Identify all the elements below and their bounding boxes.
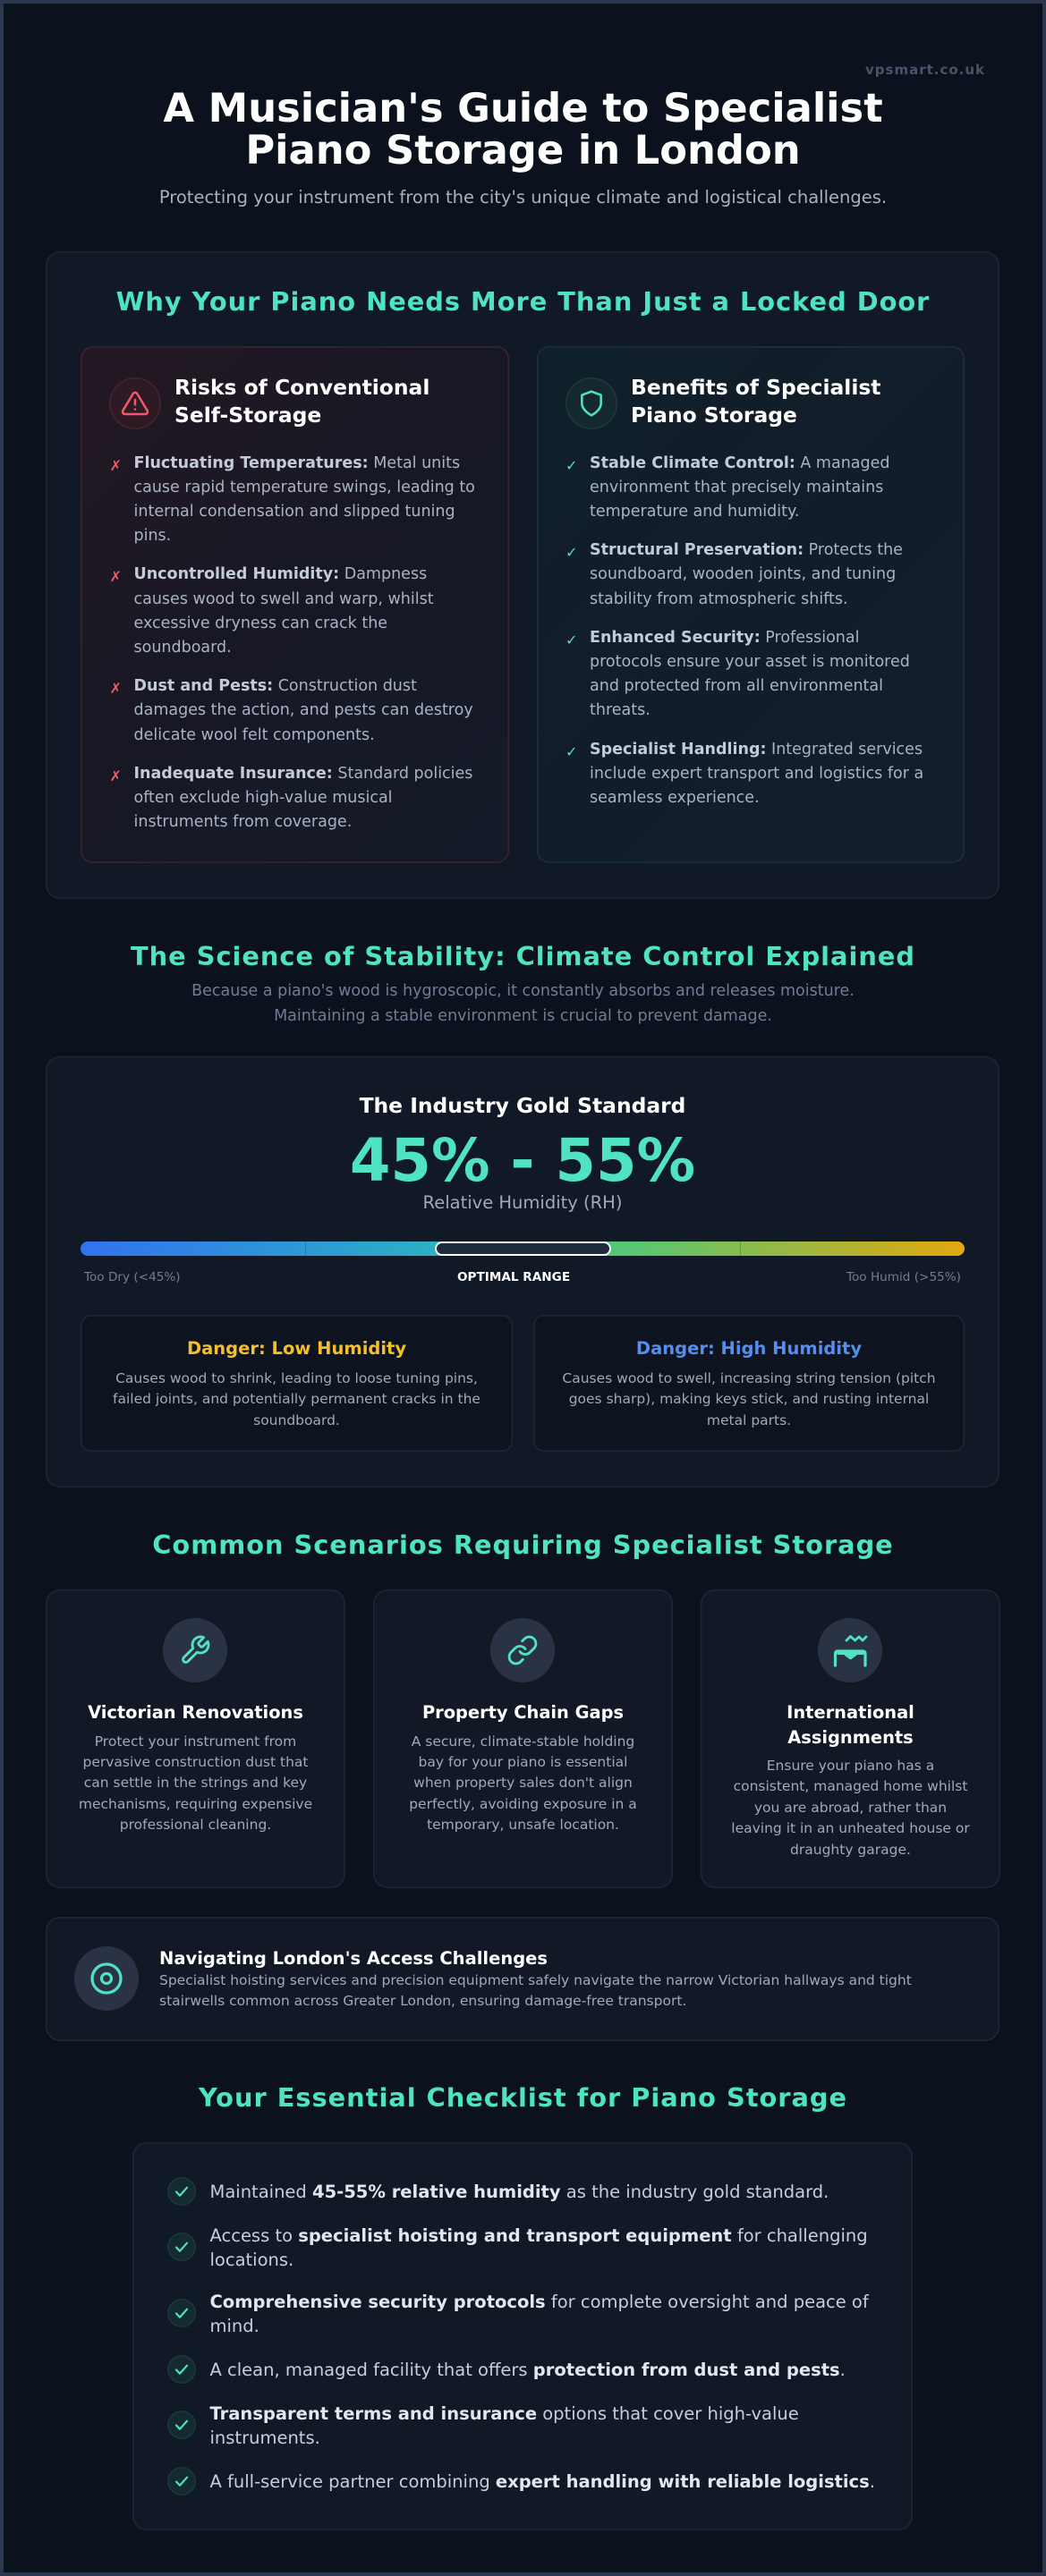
text: victorian: professional cleaning. xyxy=(120,1817,271,1833)
icon: link xyxy=(490,1618,555,1682)
stat: humidity range: 45% - 55% xyxy=(350,1127,695,1195)
chart: humidity bar xyxy=(81,1241,965,1256)
checklist item 4: A clean, managed facility that offers protection from dust and pests. xyxy=(209,2360,846,2380)
text: high humidity xyxy=(562,1370,936,1428)
panel: risks xyxy=(81,346,509,863)
list: benefits: seamless experience. xyxy=(590,789,760,807)
heading: why: Why Your Piano Needs More Than Just a Locked Door xyxy=(116,286,930,317)
panel: benefits: ✓ xyxy=(566,456,577,474)
heading: common scenarios: Common Scenarios Requiring Specialist Storage xyxy=(152,1530,894,1560)
text: property chain: bay for your piano is essential xyxy=(419,1754,627,1770)
check icon 1 xyxy=(167,2177,196,2206)
heading: benefits: Piano Storage xyxy=(631,402,797,428)
title: Piano Storage in London xyxy=(245,126,801,174)
list: risks: Dust and Pests: Construction dust xyxy=(134,677,417,695)
text: access challenges: stairwells common across Greater London, ensuring damage-free transport. xyxy=(159,1993,686,2009)
list: benefits: Enhanced Security: Professional xyxy=(590,629,859,647)
text: property chain: when property sales don't align xyxy=(413,1775,633,1791)
list: benefits: soundboard, wooden joints, and tuning xyxy=(590,565,896,583)
checklist item 5: instruments. xyxy=(209,2428,320,2448)
list: benefits: Specialist Handling: Integrated services xyxy=(590,741,923,758)
icon: shield xyxy=(566,377,617,429)
checklist item 2: locations. xyxy=(209,2250,293,2270)
text: international: consistent, managed home whilst xyxy=(734,1778,967,1794)
card: low humidity xyxy=(81,1315,513,1452)
panel: checklist xyxy=(132,2142,913,2530)
list: risks: pins. xyxy=(134,527,171,545)
divider: dry segment xyxy=(305,1241,306,1256)
text: property chain xyxy=(409,1733,637,1833)
panel: humidity standard xyxy=(46,1056,999,1487)
text: international xyxy=(731,1758,970,1858)
heading: checklist: Your Essential Checklist for Piano Storage xyxy=(199,2082,847,2113)
text: property chain: A secure, climate-stable holding xyxy=(412,1733,634,1750)
list: risks: Fluctuating Temperatures: Metal units xyxy=(134,454,460,472)
text: low humidity: Causes wood to shrink, leading to loose tuning pins, xyxy=(115,1370,478,1386)
list: risks: excessive dryness can crack the xyxy=(134,614,387,632)
checklist item 1: Maintained 45-55% relative humidity as the industry gold standard. xyxy=(209,2182,829,2202)
panel: risks: ✗ xyxy=(109,456,122,474)
checklist item 2 xyxy=(209,2225,868,2270)
text: low humidity xyxy=(113,1370,480,1428)
bar gradient xyxy=(81,1241,965,1256)
heading: benefits: Benefits of Specialist xyxy=(631,375,880,400)
text: international: you are abroad, rather than xyxy=(754,1800,947,1816)
text: property chain: perfectly, avoiding exposure in a xyxy=(409,1796,637,1812)
panel: benefits: ✓ xyxy=(566,544,577,561)
icon: wrench xyxy=(163,1618,227,1682)
check icon 6 xyxy=(167,2467,196,2496)
panel: risks: ✗ xyxy=(109,767,122,784)
checklist item 3: mind. xyxy=(209,2316,259,2336)
text: victorian: can settle in the strings and key xyxy=(84,1775,307,1791)
list: risks xyxy=(109,454,475,831)
list: risks: internal condensation and slipped tuning xyxy=(134,503,455,521)
optimal range marker xyxy=(435,1241,611,1256)
divider: humid segment xyxy=(740,1241,741,1256)
text: victorian: pervasive construction dust that xyxy=(82,1754,308,1770)
icon: warning triangle xyxy=(109,377,161,429)
subtitle: Protecting your instrument from the city's unique climate and logistical challenges. xyxy=(159,187,887,208)
panel: risks: ✗ xyxy=(109,680,122,697)
title: A Musician's Guide to Specialist xyxy=(163,84,883,131)
list: risks: soundboard. xyxy=(134,639,232,657)
heading: property chain: Property Chain Gaps xyxy=(422,1702,624,1723)
list: benefits: Structural Preservation: Protects the xyxy=(590,541,903,559)
checklist item 5: Transparent terms and insurance options that cover high-value xyxy=(209,2403,799,2424)
text: international: leaving it in an unheated house or xyxy=(731,1820,970,1836)
heading: access challenges: Navigating London's Access Challenges xyxy=(159,1948,548,1969)
checklist item 6: A full-service partner combining expert handling with reliable logistics. xyxy=(209,2471,875,2492)
checklist item 5 xyxy=(209,2403,799,2448)
text: science intro: Because a piano's wood is hygroscopic, it constantly absorbs and releases moisture. xyxy=(191,982,855,1000)
check icon 4 xyxy=(167,2355,196,2384)
panel: access challenges xyxy=(46,1917,999,2041)
card: international assignments xyxy=(701,1589,1000,1888)
text: low humidity: soundboard. xyxy=(253,1412,340,1428)
heading: low humidity: Danger: Low Humidity xyxy=(187,1338,406,1359)
label: too dry: Too Dry (<45%) xyxy=(84,1270,181,1284)
label: relative humidity: Relative Humidity (RH) xyxy=(423,1191,622,1213)
text: science intro xyxy=(191,982,855,1025)
text: property chain: temporary, unsafe location. xyxy=(427,1817,619,1833)
panel: benefits xyxy=(537,346,965,863)
panel: benefits: ✓ xyxy=(566,631,577,648)
list: benefits: threats. xyxy=(590,701,651,719)
heading: risks: Self-Storage xyxy=(174,402,321,428)
title xyxy=(163,84,883,174)
list: benefits xyxy=(566,454,923,807)
panel: benefits: ✓ xyxy=(566,743,577,760)
card: high humidity xyxy=(533,1315,965,1452)
text: access challenges: Specialist hoisting services and precision equipment safely navigate the narrow Victorian hallways and tight xyxy=(159,1972,912,1988)
list: benefits: stability from atmospheric shifts. xyxy=(590,590,848,608)
list: risks: damages the action, and pests can destroy xyxy=(134,701,473,719)
label: optimal range: OPTIMAL RANGE xyxy=(457,1270,570,1284)
heading: gold standard: The Industry Gold Standard xyxy=(360,1093,685,1118)
list: benefits: protocols ensure your asset is monitored xyxy=(590,653,910,671)
list: risks: delicate wool felt components. xyxy=(134,726,375,744)
text: international: draughty garage. xyxy=(790,1842,911,1858)
heading: risks: Risks of Conventional xyxy=(174,375,429,400)
heading: benefits xyxy=(631,375,880,428)
list: risks: causes wood to swell and warp, whilst xyxy=(134,590,434,608)
heading: risks xyxy=(174,375,429,428)
checklist item 3 xyxy=(209,2292,870,2336)
list: risks: often exclude high-value musical xyxy=(134,789,393,807)
watermark: vpsmart.co.uk xyxy=(865,62,985,78)
text: victorian: Protect your instrument from xyxy=(95,1733,296,1750)
checklist item 2: Access to specialist hoisting and transport equipment for challenging xyxy=(209,2225,868,2246)
heading: science of stability: The Science of Stability: Climate Control Explained xyxy=(131,941,915,971)
list: benefits: include expert transport and logistics for a xyxy=(590,765,923,783)
panel: risks: ✗ xyxy=(109,568,122,585)
list: risks: cause rapid temperature swings, leading to xyxy=(134,479,475,496)
list: benefits: and protected from all environmental xyxy=(590,677,883,695)
text: international: Ensure your piano has a xyxy=(767,1758,934,1774)
label: too humid: Too Humid (>55%) xyxy=(846,1270,961,1284)
list: benefits: temperature and humidity. xyxy=(590,503,799,521)
text: low humidity: failed joints, and potentially permanent cracks in the xyxy=(113,1391,480,1407)
text: access challenges xyxy=(159,1972,912,2009)
icon: piano and wave xyxy=(818,1618,882,1682)
text: science intro: Maintaining a stable environment is crucial to prevent damage. xyxy=(274,1007,772,1025)
heading: international: International xyxy=(787,1702,914,1723)
card: property chain gaps xyxy=(373,1589,673,1888)
heading: victorian: Victorian Renovations xyxy=(88,1702,303,1723)
text: victorian: mechanisms, requiring expensive xyxy=(79,1796,312,1812)
heading: international: Assignments xyxy=(787,1726,914,1748)
heading: international xyxy=(787,1702,914,1748)
checklist item 3: Comprehensive security protocols for complete oversight and peace of xyxy=(209,2292,869,2312)
check icon 5 xyxy=(167,2411,196,2439)
heading: high humidity: Danger: High Humidity xyxy=(636,1338,862,1359)
list: risks: Uncontrolled Humidity: Dampness xyxy=(134,565,427,583)
text: high humidity: Causes wood to swell, increasing string tension (pitch xyxy=(562,1370,936,1386)
check icon 2 xyxy=(167,2233,196,2261)
list: benefits: environment that precisely maintains xyxy=(590,479,883,496)
text: high humidity: goes sharp), making keys stick, and rusting internal xyxy=(569,1391,929,1407)
list: benefits: Stable Climate Control: A managed xyxy=(590,454,889,472)
check icon 3 xyxy=(167,2299,196,2327)
list: risks: instruments from coverage. xyxy=(134,813,352,831)
text: high humidity: metal parts. xyxy=(707,1412,791,1428)
text: victorian xyxy=(79,1733,312,1833)
icon: target xyxy=(74,1946,139,2011)
card: victorian renovations xyxy=(46,1589,345,1888)
list: risks: Inadequate Insurance: Standard policies xyxy=(134,765,472,783)
panel: why your piano needs more xyxy=(46,251,999,899)
